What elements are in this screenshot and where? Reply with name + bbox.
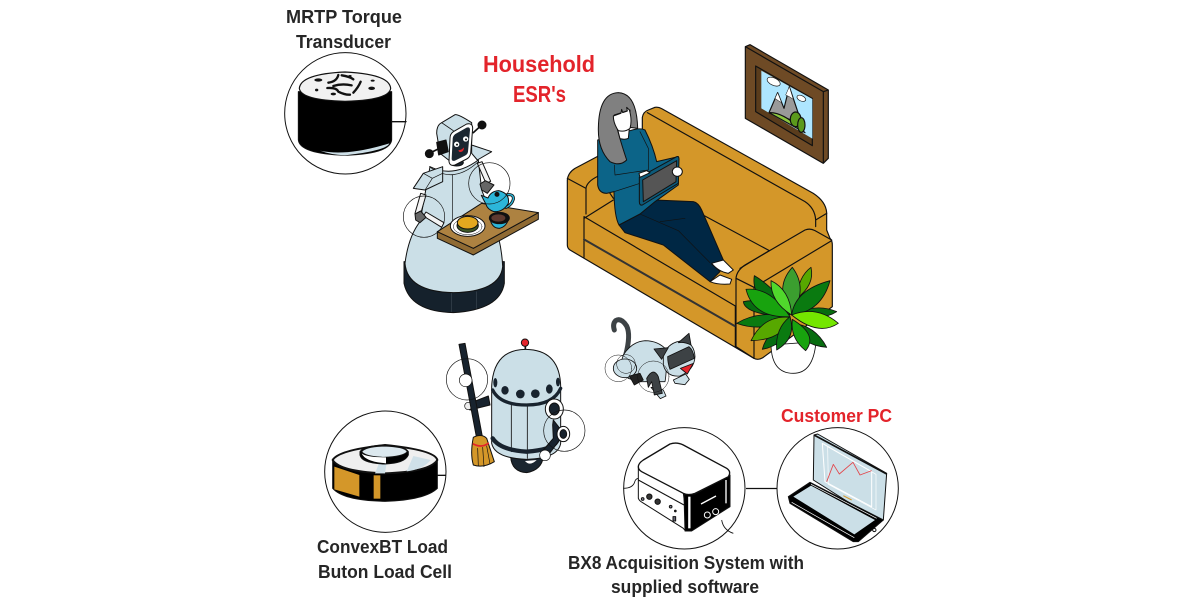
visor: [668, 347, 694, 369]
wires: [623, 478, 733, 533]
other arm: [543, 420, 565, 455]
joint circles: [605, 355, 632, 382]
antenna: [523, 345, 528, 358]
icon: BX8 acquisition system callout: [623, 428, 745, 549]
label: BX8 Acquisition System with supplied software: [568, 552, 804, 597]
broom robot: [446, 339, 585, 473]
robot cat: [605, 320, 695, 399]
teapot: [506, 195, 513, 207]
label: MRTP Torque Transducer: MRTP Torque: [286, 6, 402, 27]
tail: [614, 320, 629, 355]
paws: [673, 374, 689, 385]
legs: [619, 200, 723, 282]
robot body: [492, 349, 561, 459]
keyboard base: [788, 482, 883, 542]
burger on plate: [450, 216, 485, 236]
label: ConvexBT Load Buton Load Cell: Buton Load Cell: [318, 561, 452, 582]
broom arm: [465, 396, 490, 410]
wheel: [511, 457, 543, 473]
hair: [598, 93, 638, 164]
heading: Household ESR's: ESR's: [513, 81, 566, 107]
icon: load cell callout: [325, 411, 446, 532]
face: [618, 128, 629, 139]
heading: Household ESR's: [483, 51, 595, 107]
tablet: [639, 157, 679, 205]
icon: torque transducer callout: [285, 53, 406, 174]
sofa arm: [736, 229, 832, 358]
label: MRTP Torque Transducer: [286, 6, 402, 52]
broom handle: [459, 343, 483, 438]
antennas: [429, 125, 482, 153]
icon: customer PC laptop callout: [777, 428, 898, 549]
legs: [629, 373, 643, 385]
heading: Household ESR's: Household: [483, 51, 595, 77]
feet: [712, 260, 733, 273]
label: ConvexBT Load Buton Load Cell: [317, 536, 452, 582]
white joints: [459, 374, 472, 387]
box top: [638, 443, 730, 494]
screen: [813, 434, 887, 520]
mouth: [680, 363, 693, 374]
label: BX8 Acquisition System with supplied software: BX8 Acquisition System with: [568, 552, 804, 573]
robot: waiter robot with tray: [403, 115, 538, 313]
robot shoulders: [472, 145, 492, 160]
robot base: [404, 262, 504, 313]
label: BX8 Acquisition System with supplied software: supplied software: [611, 576, 759, 597]
picture frame: [745, 45, 828, 163]
robot arms: [415, 193, 426, 216]
connector line: [746, 488, 777, 490]
joint callout circles: [446, 359, 488, 400]
pot: [771, 342, 816, 373]
ears: [678, 333, 691, 345]
label: ConvexBT Load Buton Load Cell: ConvexBT Load: [317, 536, 448, 557]
robot head: [437, 115, 472, 165]
label: Customer PC: Customer PC: [781, 405, 892, 426]
body dots: [493, 378, 560, 398]
chart line: [827, 462, 872, 482]
woman with tablet: [598, 93, 733, 284]
sofa: [567, 107, 832, 359]
hands: [639, 171, 650, 177]
ports: [647, 494, 652, 499]
landscape painting: [761, 71, 812, 139]
robot skirt and torso: [405, 160, 503, 293]
torso: [598, 129, 678, 225]
body: [622, 341, 667, 382]
joint callout circles: [403, 196, 445, 237]
broom head: [472, 436, 494, 466]
box sides: [638, 467, 688, 531]
potted plant: [737, 267, 838, 373]
head: [663, 341, 695, 376]
tray: [437, 213, 538, 255]
label: MRTP Torque Transducer: Transducer: [296, 31, 391, 52]
cup: [490, 217, 509, 228]
seat cushion: [584, 213, 769, 347]
leaves: [754, 276, 790, 315]
